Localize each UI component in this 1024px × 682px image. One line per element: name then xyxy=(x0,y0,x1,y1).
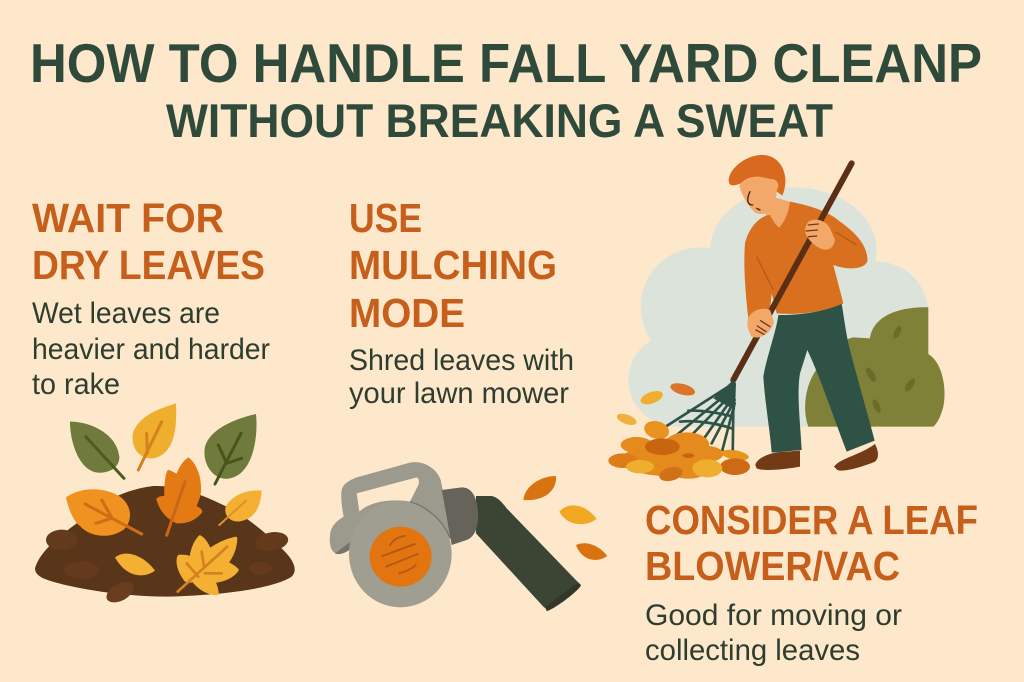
tip: use mulching mode: USE xyxy=(349,195,422,241)
tip: wait for dry leaves: Wet leaves are xyxy=(32,297,220,330)
tip: consider a leaf blower/vac: CONSIDER A LEAF xyxy=(645,497,978,543)
tip: use mulching mode: MULCHING xyxy=(349,242,557,288)
tip: consider a leaf blower/vac xyxy=(645,497,978,667)
title xyxy=(30,32,982,147)
tip: consider a leaf blower/vac: collecting leaves xyxy=(645,634,860,667)
tip: use mulching mode: MODE xyxy=(349,290,465,336)
title: WITHOUT BREAKING A SWEAT xyxy=(166,94,833,147)
illustration: man raking leaves xyxy=(608,155,945,484)
tip: use mulching mode: Shred leaves with xyxy=(349,344,574,377)
icon: leaf blower xyxy=(330,462,607,611)
tip: wait for dry leaves: DRY LEAVES xyxy=(32,242,265,288)
tip: wait for dry leaves: to rake xyxy=(32,368,120,401)
icon: leaf pile xyxy=(35,403,295,607)
tip: wait for dry leaves xyxy=(32,195,270,401)
tip: use mulching mode xyxy=(349,195,574,410)
tip: consider a leaf blower/vac: Good for moving or xyxy=(645,599,902,632)
tip: wait for dry leaves: WAIT FOR xyxy=(32,195,224,241)
tip: wait for dry leaves: heavier and harder xyxy=(32,333,270,366)
tip: use mulching mode: your lawn mower xyxy=(349,377,569,410)
tip: consider a leaf blower/vac: BLOWER/VAC xyxy=(645,543,900,589)
